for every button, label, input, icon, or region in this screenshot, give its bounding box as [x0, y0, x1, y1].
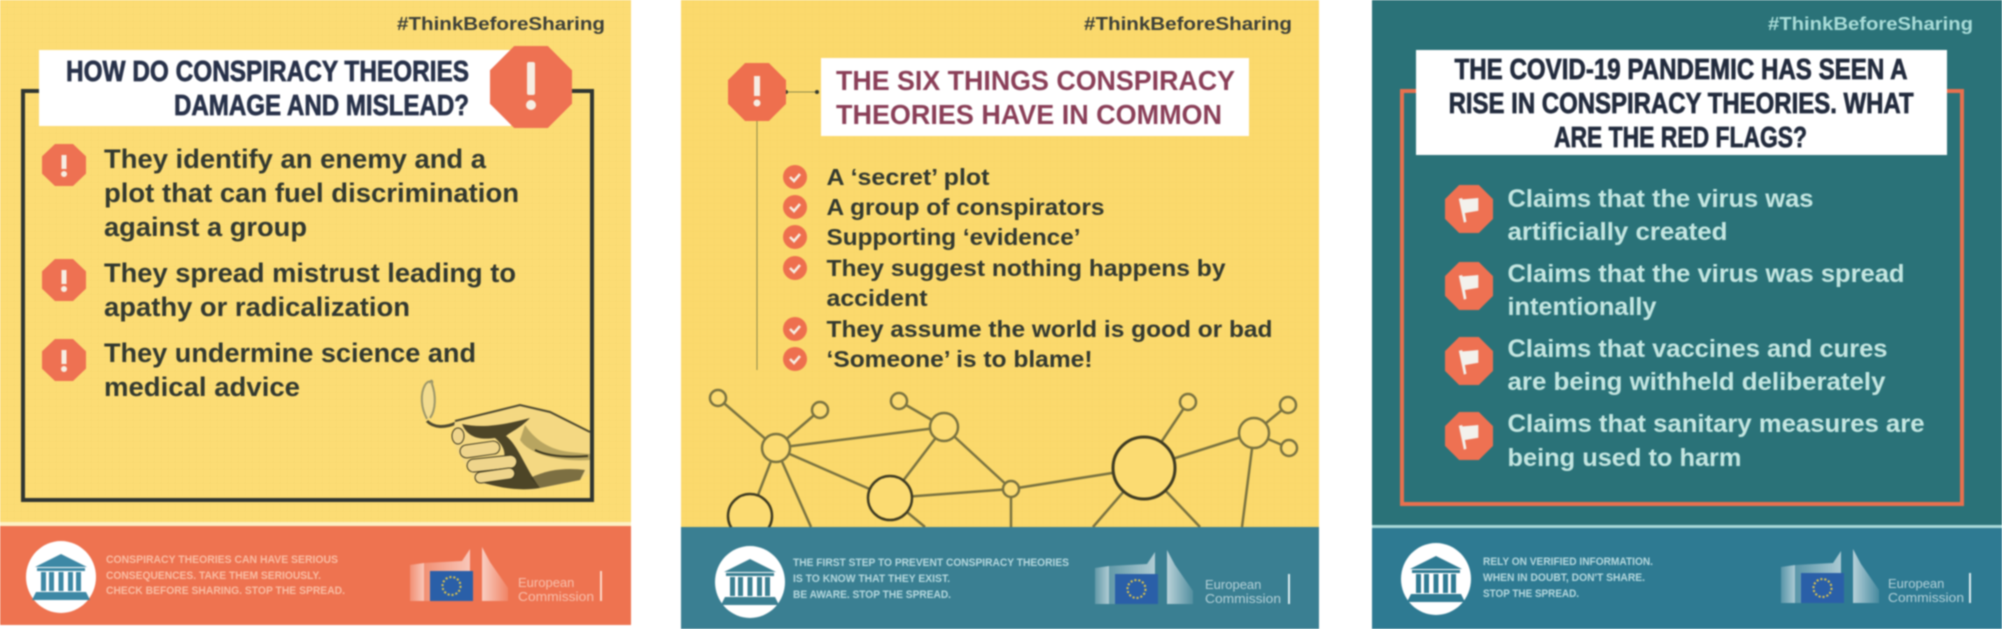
- checklist: ‘Someone’ is to blame!: [826, 346, 1092, 372]
- checklist: Supporting ‘evidence’: [826, 224, 1080, 250]
- list: damage items: plot that can fuel discrimination: [104, 178, 519, 208]
- checklist: They assume the world is good or bad: [826, 316, 1272, 342]
- connector lines: [757, 90, 819, 370]
- footer message: WHEN IN DOUBT, DON'T SHARE.: [1483, 572, 1645, 584]
- list: red flag claims: being used to harm: [1508, 444, 1742, 472]
- footer message: THE FIRST STEP TO PREVENT CONSPIRACY THEORIES: [793, 557, 1069, 569]
- hashtag: #ThinkBeforeSharing: [1768, 14, 1973, 34]
- logo: European Commission: [1781, 549, 1971, 605]
- footer message: CONSPIRACY THEORIES CAN HAVE SERIOUS: [106, 554, 338, 566]
- heading banner: [821, 58, 1249, 136]
- checklist: [826, 164, 1272, 372]
- icon: UNESCO temple logo: [1401, 543, 1471, 615]
- icons: small warning octagons: [42, 144, 86, 381]
- heading banner: HOW DO CONSPIRACY THEORIES: [66, 56, 469, 88]
- icon: UNESCO temple logo: [715, 546, 785, 618]
- logo: European Commission: European: [1205, 577, 1261, 592]
- footer message: [1483, 556, 1653, 600]
- checklist: They suggest nothing happens by: [826, 255, 1226, 281]
- heading banner: THE COVID-19 PANDEMIC HAS SEEN A: [1454, 54, 1908, 86]
- checklist: accident: [826, 285, 928, 311]
- hashtag: #ThinkBeforeSharing: [1084, 14, 1292, 34]
- frame: [1402, 91, 1962, 504]
- icons: check marks: [783, 165, 807, 371]
- list: red flag claims: Claims that the virus was: [1508, 185, 1814, 213]
- logo: European Commission: European: [1888, 576, 1944, 591]
- footer: blue band: [1372, 525, 2002, 629]
- footer: orange band: [0, 522, 631, 625]
- footer message: IS TO KNOW THAT THEY EXIST.: [793, 573, 950, 585]
- panel: six things conspiracy theories have in common: [681, 0, 1319, 629]
- list: red flag claims: intentionally: [1508, 293, 1657, 321]
- logo: European Commission: European: [518, 575, 574, 590]
- checklist: A group of conspirators: [826, 194, 1104, 220]
- list: red flag claims: [1508, 185, 1925, 472]
- heading banner: THEORIES HAVE IN COMMON: [836, 99, 1222, 130]
- list: damage items: medical advice: [104, 372, 300, 402]
- list: damage items: apathy or radicalization: [104, 292, 410, 322]
- icons: red flags: [1445, 185, 1493, 460]
- hashtag: #ThinkBeforeSharing: [397, 14, 605, 34]
- footer message: BE AWARE. STOP THE SPREAD.: [793, 589, 951, 601]
- icon: UNESCO temple logo: [26, 541, 96, 613]
- list: damage items: They identify an enemy and a: [104, 144, 487, 174]
- heading banner: DAMAGE AND MISLEAD?: [174, 90, 469, 122]
- icon: hand holding a lit match: [422, 381, 590, 490]
- heading banner: ARE THE RED FLAGS?: [1554, 122, 1807, 154]
- list: damage items: They undermine science and: [104, 338, 476, 368]
- icon: warning octagon: [728, 63, 786, 121]
- footer message: [793, 557, 1069, 601]
- list: red flag claims: Claims that sanitary measures are: [1508, 410, 1925, 438]
- footer message: STOP THE SPREAD.: [1483, 588, 1579, 600]
- list: damage items: against a group: [104, 212, 307, 242]
- list: red flag claims: are being withheld deliberately: [1508, 368, 1886, 396]
- footer: teal band: [681, 527, 1319, 629]
- logo: European Commission: [1095, 550, 1290, 606]
- logo: European Commission: Commission: [518, 589, 594, 604]
- heading banner: RISE IN CONSPIRACY THEORIES. WHAT: [1449, 88, 1914, 120]
- heading banner: THE SIX THINGS CONSPIRACY: [836, 65, 1235, 96]
- panel: COVID-19 red flags: [1372, 0, 2002, 629]
- logo: European Commission: [410, 547, 602, 604]
- footer message: CHECK BEFORE SHARING. STOP THE SPREAD.: [106, 585, 345, 597]
- footer message: [106, 554, 345, 597]
- heading banner: [1416, 50, 1947, 155]
- logo: European Commission: Commission: [1888, 590, 1964, 605]
- footer message: CONSEQUENCES. TAKE THEM SERIOUSLY.: [106, 570, 321, 582]
- panel: how conspiracy theories damage and mislead: [0, 0, 631, 625]
- list: damage items: [104, 144, 519, 402]
- heading banner: [39, 50, 511, 126]
- list: red flag claims: Claims that vaccines and cures: [1508, 335, 1888, 363]
- icon: large warning octagon: [490, 46, 572, 128]
- network diagram: [710, 390, 1297, 538]
- logo: European Commission: Commission: [1205, 591, 1281, 606]
- footer message: RELY ON VERIFIED INFORMATION.: [1483, 556, 1653, 568]
- checklist: A ‘secret’ plot: [826, 164, 990, 190]
- list: damage items: They spread mistrust leading to: [104, 258, 516, 288]
- list: red flag claims: Claims that the virus was spread: [1508, 260, 1904, 288]
- list: red flag claims: artificially created: [1508, 218, 1728, 246]
- frame: [23, 91, 592, 500]
